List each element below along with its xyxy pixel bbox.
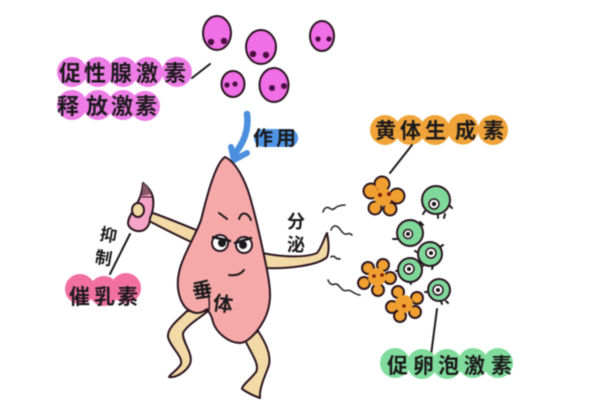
pituitary character: 体	[211, 292, 234, 317]
left leg	[168, 311, 208, 377]
left arm	[147, 212, 201, 246]
right arm	[262, 233, 328, 268]
pointer line: LH	[390, 145, 412, 173]
mouth	[229, 270, 244, 275]
cell 5	[425, 279, 450, 304]
cell 3	[415, 242, 443, 269]
eyebrows	[219, 213, 227, 219]
pointer line: inhibit	[110, 234, 130, 274]
right leg	[242, 331, 269, 398]
label: action: 作用	[253, 127, 296, 150]
green FSH cells	[393, 186, 452, 304]
bottle with hand	[128, 183, 153, 231]
centre crease	[208, 290, 209, 310]
pointer line: GnRH to cells	[192, 64, 210, 78]
orange LH cells	[357, 176, 424, 323]
label: FSH	[380, 348, 513, 379]
label: prolactin: 催乳素	[69, 286, 138, 309]
label: inhibit	[93, 225, 118, 269]
label: inhibit: 抑	[98, 225, 118, 246]
cell 2	[393, 220, 423, 246]
arrow: acts on pituitary	[231, 114, 247, 160]
cell 3	[385, 285, 424, 323]
hand	[132, 203, 144, 217]
right eye	[236, 237, 252, 253]
cell 1	[422, 186, 452, 218]
label: secrete: 分	[287, 212, 305, 232]
label: GnRH: 释放激素	[57, 94, 157, 119]
label: GnRH	[57, 57, 192, 121]
label: inhibit: 制	[93, 248, 113, 269]
cell 2	[357, 258, 397, 297]
secretion squiggles	[323, 205, 360, 295]
pituitary character	[147, 157, 328, 398]
label: LH: 黄体生成素	[375, 119, 504, 143]
pink GnRH cells	[203, 16, 334, 102]
left eye	[212, 235, 228, 251]
label: LH	[370, 114, 508, 145]
label: secrete: 泌	[287, 235, 305, 255]
body	[178, 157, 270, 343]
label: FSH: 促卵泡激素	[387, 355, 512, 378]
label: prolactin	[65, 273, 141, 309]
label: secrete	[287, 212, 305, 255]
cell 4	[396, 258, 423, 284]
cell 1	[362, 176, 406, 216]
pointer line: FSH	[431, 309, 437, 355]
label: GnRH: 促性腺激素	[59, 61, 186, 86]
body text: 垂	[191, 278, 214, 303]
